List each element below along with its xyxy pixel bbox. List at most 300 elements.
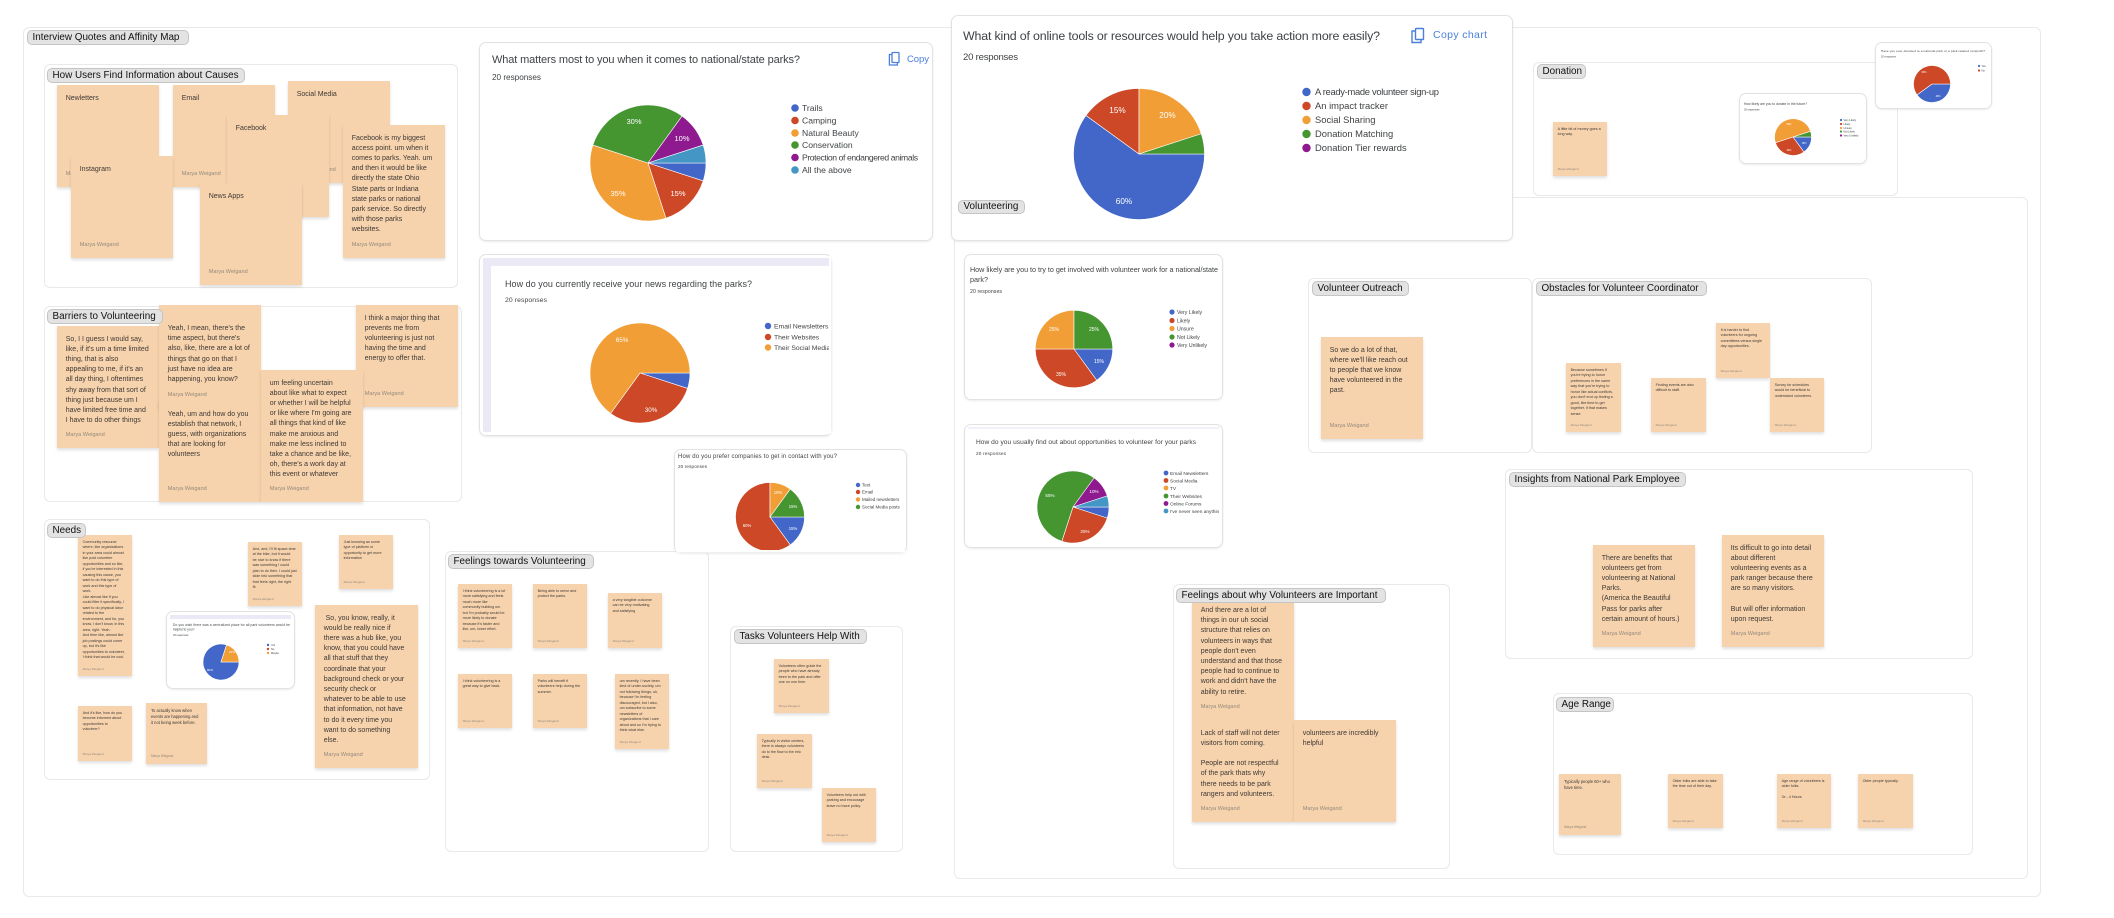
sticky: older people typically: [1858, 774, 1913, 828]
sticky: benefits quote: Pass for parks after: [1602, 606, 1662, 613]
chart card: centralized place pie chart: Do you wish there was a centralized place for all park volunteers would be: [173, 623, 290, 627]
sticky: community resource quote: opportunities to volunteer,: [83, 650, 125, 654]
sticky: central hub quote: security check or: [324, 686, 376, 693]
sticky: satisfying quote: much more like: [463, 600, 488, 604]
chart card: receive news pie chart: [479, 254, 832, 436]
sticky: lack of staff quote: rangers and volunteers.: [1201, 791, 1274, 798]
heading: Volunteer Outreach: [1312, 281, 1409, 296]
sticky: reach out quote: past.: [1330, 387, 1345, 394]
sticky: feeling uncertain quote: make me anxious and: [270, 431, 338, 438]
sticky: plan ahead quote: And, and, I'll fit space-time: [253, 546, 296, 550]
sticky: newsletters quote: organizations that I care: [620, 717, 659, 721]
chart card: how likely to volunteer pie chart: 25%: [1049, 327, 1060, 333]
sticky: feeling uncertain quote: about like what to expect: [270, 390, 347, 397]
sticky: reach out quote: [1321, 337, 1423, 439]
sticky: community resource quote: want to do this type of: [83, 578, 118, 582]
panel: Barriers to Volunteering: [44, 306, 462, 502]
sticky: people 60+: Typically people 60+ who: [1564, 779, 1610, 784]
chart card: find out about opportunities pie chart: 55%: [1045, 493, 1055, 498]
sticky: older folks time: Older folks are able to take: [1673, 778, 1717, 782]
panel: Age Range: [1553, 693, 1973, 855]
sticky: preferences quote: together, if that makes: [1571, 406, 1607, 410]
chart card: online tools pie chart: 60%: [1116, 197, 1132, 206]
sticky: plan ahead quote: fit.: [253, 585, 256, 589]
chart card: how likely to volunteer pie chart: [964, 254, 1223, 400]
sticky: benefits quote: There are benefits that: [1602, 554, 1672, 562]
heading: Needs: [47, 523, 86, 538]
sticky: parks benefit quote: Marya Weigand: [538, 719, 559, 723]
sticky: benefits quote: volunteering at National: [1602, 575, 1675, 582]
sticky: lack of staff quote: of the park thats why: [1201, 770, 1265, 777]
sticky: platform quote: [339, 535, 393, 589]
sticky: community resource quote: causing this cause, you: [83, 572, 121, 576]
chart card: find out about opportunities pie chart: [964, 424, 1223, 548]
sticky: incredibly helpful quote: [1294, 720, 1396, 822]
sticky: limited time quote: [57, 326, 159, 448]
sticky: Social Media: Social Media: [297, 90, 337, 98]
sticky: community resource quote: area, right. Yeah.: [83, 628, 110, 632]
chart card: likely to donate pie chart: Very Likely: [1844, 118, 1857, 122]
sticky: know when events happen: it not being week before.: [151, 720, 196, 725]
heading: Insights from National Park Employee: Insights from National Park Employee: [1514, 474, 1680, 485]
chart card: prefer contact pie chart: Text: [862, 482, 871, 488]
sticky: Facebook quote: comes to parks. Yeah. um: [352, 155, 432, 162]
sticky: social structure quote: work and didn't have the: [1201, 678, 1276, 685]
chart card: find out about opportunities pie chart: 10%: [1089, 489, 1099, 494]
chart card: receive news pie chart: Email Newsletters: [774, 324, 829, 330]
chart card: what matters most pie chart: Camping: [802, 116, 837, 126]
chart card: what matters most pie chart: Trails: [802, 103, 823, 113]
sticky: ongoing committees: It is harder to find: [1721, 328, 1749, 332]
sticky: feeling uncertain quote: take a chance and be like,: [270, 451, 351, 458]
sticky: visitor centers: desk.: [762, 755, 770, 759]
sticky: social structure quote: Marya Weigand: [1201, 704, 1240, 710]
sticky: benefits quote: volunteers get from: [1602, 565, 1662, 572]
sticky: know when events happen: events are happening and: [151, 714, 198, 719]
sticky: plan ahead quote: be nice to know if there: [253, 558, 291, 562]
chart card: receive news pie chart: Their Websites: [774, 334, 820, 342]
chart card: prefer contact pie chart: Email: [862, 490, 873, 494]
sticky: become informed quote: opportunities to: [83, 722, 108, 726]
sticky: satisfying quote: more satisfying and feels: [463, 594, 503, 598]
sticky: community resource quote: Community resource: [83, 540, 117, 544]
chart card: centralized place pie chart: Maybe: [271, 651, 279, 655]
sticky: know when events happen: To actually know when: [151, 708, 192, 713]
sticky: reach out quote: to people that we know: [1330, 367, 1401, 374]
sticky: age range of volunteers: 3x - 4 Hours: [1782, 795, 1802, 799]
sticky: newsletters quote: about and so I'm trying to: [620, 722, 661, 726]
sticky: platform quote: information: [344, 556, 362, 560]
sticky: time and energy quote: I think a major thing that: [365, 314, 439, 322]
chart card: how likely to volunteer pie chart: park?: [970, 275, 988, 284]
heading: Barriers to Volunteering: [47, 309, 163, 324]
sticky: limited time quote: So, I I guess I would say,: [66, 336, 143, 342]
sticky: Facebook quote: State parts or Indiana: [352, 186, 419, 193]
sticky: central hub quote: coordinate that your: [324, 666, 386, 673]
sticky: establish network quote: establish that network, I: [168, 421, 241, 428]
sticky: plan ahead quote: Marya Weigand: [253, 597, 274, 601]
sticky: incredibly helpful quote: helpful: [1303, 740, 1323, 747]
chart card: prefer contact pie chart: 15%: [789, 504, 797, 509]
sticky: central hub quote: want to do something: [324, 727, 390, 734]
sticky: Facebook quote: access point. um when it: [352, 145, 428, 152]
sticky: central hub quote: else.: [324, 737, 338, 744]
sticky: little bit of money: [1553, 122, 1607, 176]
sticky: central hub quote: whatever to be able to use: [324, 696, 406, 703]
chart card: likely to donate pie chart: [1739, 93, 1867, 164]
sticky: difficult to detail quote: about different: [1731, 555, 1775, 562]
sticky: ongoing committees: [1716, 323, 1770, 378]
sticky: benefits quote: [1593, 545, 1695, 647]
sticky: community resource quote: where, like organizations: [83, 545, 123, 549]
sticky: community resource quote: work and this type of: [83, 584, 116, 588]
heading: Insights from National Park Employee: [1509, 472, 1686, 487]
sticky: community resource quote: if you're interested in this: [83, 567, 123, 571]
sticky: difficult to detail quote: But will offer information: [1731, 606, 1805, 613]
sticky: reach out quote: So we do a lot of that,: [1330, 346, 1397, 354]
chart card: what matters most pie chart: Conservation: [802, 140, 853, 150]
chart card: centralized place pie chart: 80%: [207, 668, 213, 672]
sticky: older folks time: the time out of their day.: [1673, 784, 1712, 788]
heading: Needs: Needs: [52, 525, 81, 536]
chart card: how likely to volunteer pie chart: 15%: [1094, 359, 1105, 365]
sticky: feeling uncertain quote: Marya Weigand: [270, 486, 309, 492]
chart card: how likely to volunteer pie chart: 35%: [1056, 372, 1067, 378]
chart card: online tools pie chart: Copy chart: [1433, 29, 1487, 41]
chart card: online tools pie chart: An impact tracker: [1315, 100, 1388, 111]
sticky: Facebook: [227, 115, 329, 217]
chart card: how likely to volunteer pie chart: 25%: [1089, 327, 1100, 333]
sticky: establish network quote: Marya Weigand: [168, 486, 207, 492]
chart card: ever donated pie chart: 20 responses: [1881, 56, 1897, 58]
sticky: schedule surveys: Survey for schedules: [1775, 382, 1809, 386]
sticky: incredibly helpful quote: volunteers are incredibly: [1303, 730, 1379, 736]
sticky: parking: parking and encourage: [827, 798, 864, 802]
sticky: tangible outcome quote: [608, 593, 662, 648]
sticky: limited time quote: thing, that is also: [66, 356, 118, 363]
sticky: satisfying quote: I think volunteering is a lot: [463, 588, 505, 592]
sticky: schedule surveys: understand volunteers.: [1775, 394, 1812, 398]
chart card: ever donated pie chart: [1875, 42, 1992, 109]
sticky: Facebook quote: and then it would be like: [352, 165, 427, 172]
sticky: parking: leave no trace policy.: [827, 804, 861, 808]
chart card: prefer contact pie chart: Mailed newsletters: [862, 497, 900, 502]
sticky: feeling uncertain quote: or like where I'm going are: [270, 410, 352, 417]
sticky: reach out quote: where we'll like reach out: [1330, 357, 1408, 364]
sticky: social structure quote: people don't even: [1201, 648, 1256, 655]
sticky: become informed quote: become informed about: [83, 716, 121, 720]
chart card: likely to donate pie chart: 30%: [1787, 149, 1792, 152]
sticky: central hub quote: background check or your: [324, 676, 404, 683]
sticky: limited time quote: all day thing, I oftentimes: [66, 376, 143, 383]
sticky: community resource quote: And then like, almost like: [83, 633, 123, 637]
sticky: people 60+: Marya Weigand: [1564, 825, 1586, 829]
sticky: limited time quote: Marya Weigand: [66, 432, 105, 438]
sticky: parking: Marya Weigand: [827, 833, 848, 837]
sticky: visitor centers: [757, 734, 812, 788]
sticky: preferences quote: way that you're trying to: [1571, 384, 1609, 388]
sticky: difficult to detail quote: are so many visitors.: [1731, 585, 1795, 592]
chart card: ever donated pie chart: 40%: [1936, 95, 1941, 98]
panel: How Users Find Information about Causes: [44, 64, 458, 288]
sticky: Facebook quote: [343, 125, 445, 258]
sticky: central hub quote: there was a hub like, you: [324, 635, 401, 642]
sticky: Newletters: Newletters: [66, 94, 99, 102]
sticky: limited time quote: I have to do other things: [66, 417, 141, 424]
sticky: know when events happen: [146, 703, 207, 764]
sticky: central hub quote: [315, 605, 418, 768]
sticky: establish network quote: guess, with organizations: [168, 431, 246, 438]
chart card: how likely to volunteer pie chart: 20 responses: [970, 289, 1002, 295]
chart card: online tools pie chart: What kind of online tools or resources would help you take action more easily?: [963, 29, 1380, 43]
chart card: online tools pie chart: 15%: [1109, 106, 1126, 115]
sticky: benefits quote: (America the Beautiful: [1602, 595, 1671, 602]
sticky: staffing events: [1651, 378, 1706, 432]
sticky: parking: Volunteers help out with: [827, 792, 866, 796]
chart card: likely to donate pie chart: Likely: [1844, 122, 1851, 126]
sticky: guide people: Volunteers often guide the: [779, 664, 821, 668]
sticky: feeling uncertain quote: make me less inclined to: [270, 441, 346, 448]
sticky: age range of volunteers: Age range of volunteers is: [1782, 778, 1824, 782]
sticky: guide people: one on one time.: [779, 680, 806, 684]
sticky: give back quote: [458, 674, 512, 728]
sticky: parking: [822, 788, 876, 842]
chart card: prefer contact pie chart: 20 responses: [678, 464, 708, 469]
sticky: preferences quote: sense.: [1571, 412, 1581, 416]
heading: How Users Find Information about Causes: [47, 68, 245, 83]
sticky: benefits quote: certain amount of hours.): [1602, 616, 1680, 623]
heading: Feelings towards Volunteering: Feelings towards Volunteering: [454, 556, 586, 567]
sticky: time and energy quote: volunteering is just not: [365, 335, 434, 342]
sticky: give back quote: Marya Weigand: [463, 719, 484, 723]
chart card: prefer contact pie chart: Social Media posts: [862, 504, 901, 510]
sticky: preferences quote: good, like time to get: [1571, 400, 1605, 404]
heading: Donation: [1537, 64, 1586, 79]
sticky: guide people: Marya Weigand: [779, 704, 800, 708]
sticky: central hub quote: So, you know, really, it: [326, 614, 395, 622]
chart card: ever donated pie chart: Yes: [1982, 64, 1986, 68]
sticky: social structure quote: [1192, 603, 1294, 720]
sticky: older folks time: Marya Weigand: [1673, 819, 1694, 823]
chart card: receive news pie chart: How do you currently receive your news regarding the parks?: [505, 279, 752, 289]
sticky: limited time quote: have limited free time and: [66, 407, 146, 414]
sticky: lack of staff quote: Marya Weigand: [1201, 806, 1240, 812]
sticky: parks benefit quote: [533, 674, 587, 728]
sticky: central hub quote: that information, not have: [324, 706, 403, 713]
chart card: what matters most pie chart: 35%: [610, 189, 626, 198]
sticky: newsletters quote: newsletters of: [620, 712, 642, 716]
sticky: time and energy quote: prevents me from: [365, 325, 419, 332]
sticky: satisfying quote: Marya Weigand: [463, 639, 484, 643]
sticky: limited time quote: shy away from that sort of: [66, 387, 146, 394]
sticky: feeling uncertain quote: oh, there's a work day at: [270, 461, 346, 468]
sticky: preferences quote: preferences in the same: [1571, 378, 1610, 382]
sticky: lack of staff quote: Lack of staff will not deter: [1201, 730, 1280, 736]
panel: Tasks Volunteers Help With: [730, 626, 903, 852]
chart card: find out about opportunities pie chart: Online Forums: [1170, 502, 1202, 508]
chart card: online tools pie chart: 20 responses: [963, 52, 1018, 63]
chart card: prefer contact pie chart: 15%: [789, 526, 797, 531]
sticky: difficult to detail quote: [1722, 535, 1824, 647]
heading: Tasks Volunteers Help With: Tasks Volunteers Help With: [740, 631, 860, 642]
sticky: Email: Marya Weigand: [182, 171, 221, 177]
sticky: incredibly helpful quote: Marya Weigand: [1303, 806, 1342, 812]
sticky: social structure quote: volunteers in ways that: [1201, 638, 1272, 645]
heading: Obstacles for Volunteer Coordinator: Obstacles for Volunteer Coordinator: [1542, 283, 1698, 294]
sticky: visitor centers: Marya Weigand: [762, 779, 783, 783]
sticky: community resource quote: like post volunteer: [83, 556, 112, 560]
sticky: know when events happen: Marya Weigand: [151, 754, 173, 758]
sticky: newsletters quote: not following things, uh,: [620, 690, 658, 694]
heading: Interview Quotes and Affinity Map: [27, 30, 189, 45]
chart card: likely to donate pie chart: Not Likely: [1844, 130, 1856, 134]
chart card: receive news pie chart: 65%: [616, 337, 629, 344]
sticky: ongoing committees: committees versus single: [1721, 338, 1762, 342]
panel: Volunteer Outreach: [1308, 278, 1532, 453]
sticky: people 60+: [1559, 774, 1621, 835]
chart card: ever donated pie chart: No: [1982, 68, 1985, 72]
chart card: what matters most pie chart: 15%: [670, 189, 686, 198]
sticky: tangible outcome quote: can be very motivating: [613, 603, 650, 607]
panel: Volunteering frame: [954, 197, 2028, 879]
sticky: age range of volunteers: Marya Weigand: [1782, 819, 1803, 823]
sticky: people 60+: have time.: [1564, 785, 1583, 790]
sticky: age range of volunteers: older folks.: [1782, 784, 1799, 788]
sticky: older folks time: [1668, 774, 1723, 828]
sticky: time aspect quote: Yeah, I mean, there's the: [168, 325, 245, 332]
sticky: lack of staff quote: [1192, 720, 1294, 822]
chart card: what matters most pie chart: 30%: [626, 117, 642, 126]
panel: Needs: [44, 519, 430, 780]
sticky: little bit of money: long way.: [1558, 132, 1573, 136]
sticky: newsletters quote: think what else.: [620, 728, 645, 732]
sticky: social structure quote: things in our uh social: [1201, 617, 1268, 624]
sticky: News Apps: News Apps: [209, 192, 244, 200]
sticky: satisfying quote: more likely to donate: [463, 616, 497, 620]
chart card: prefer contact pie chart: [674, 449, 907, 553]
sticky: ongoing committees: volunteers for ongoing: [1721, 333, 1757, 337]
sticky: preferences quote: Because sometimes if: [1571, 368, 1607, 372]
sticky: become informed quote: And it's like, how do you: [83, 710, 122, 714]
chart card: receive news pie chart: 30%: [645, 407, 658, 414]
sticky: plan ahead quote: [248, 542, 302, 606]
sticky: time aspect quote: [159, 305, 261, 408]
sticky: age range of volunteers: [1777, 774, 1831, 828]
sticky: give back quote: great way to give back.: [463, 684, 500, 688]
sticky: newsletters quote: Marya Weigand: [620, 740, 641, 744]
sticky: time and energy quote: having the time and: [365, 345, 426, 352]
sticky: lack of staff quote: there needs to be park: [1201, 781, 1271, 788]
chart card: prefer contact pie chart: 10%: [774, 490, 782, 495]
sticky: lack of staff quote: People are not respectful: [1201, 760, 1279, 767]
sticky: Facebook quote: Facebook is my biggest: [352, 134, 425, 142]
sticky: establish network quote: [159, 401, 261, 502]
sticky: establish network quote: volunteers: [168, 451, 200, 458]
sticky: community resource quote: environment, and for, you: [83, 616, 124, 620]
chart card: online tools pie chart: A ready-made volunteer sign-up: [1315, 86, 1439, 97]
chart card: ever donated pie chart: 60%: [1922, 71, 1927, 74]
sticky: central hub quote: know, that you could have: [324, 645, 404, 652]
sticky: News Apps: Marya Weigand: [209, 269, 248, 275]
sticky: parks benefit quote: Parks will benefit if: [538, 678, 568, 682]
sticky: Facebook quote: directly the state Ohio: [352, 175, 419, 182]
sticky: feeling uncertain quote: [261, 370, 363, 502]
sticky: newsletters quote: because I'm feeling: [620, 695, 651, 699]
sticky: guide people: people who have already: [779, 669, 820, 673]
chart card: centralized place pie chart: 20 responses: [173, 633, 189, 637]
sticky: community resource quote: Marya Weigand: [83, 667, 104, 671]
sticky: visitor centers: do to the flow to the info: [762, 750, 801, 754]
sticky: preferences quote: [1566, 363, 1621, 432]
sticky: community resource quote: related to the: [83, 611, 104, 615]
chart card: centralized place pie chart: [166, 611, 295, 689]
sticky: limited time quote: thing just because um I: [66, 397, 138, 404]
chart card: how likely to volunteer pie chart: How likely are you to try to get involved with volunteer work for a national/state: [970, 265, 1218, 274]
sticky: Social Media: Marya Weigand: [297, 167, 336, 173]
sticky: feeling uncertain quote: or whether I will be helpful: [270, 400, 351, 407]
chart card: find out about opportunities pie chart: 25%: [1080, 529, 1090, 534]
heading: Donation: Donation: [1542, 66, 1582, 77]
sticky: community resource quote: could filter it specifically, I: [83, 600, 124, 604]
chart card: likely to donate pie chart: Very Unlikely: [1844, 134, 1859, 138]
sticky: community resource quote: want to do physical labor: [83, 606, 123, 610]
chart card: how likely to volunteer pie chart: Unsure: [1177, 326, 1194, 332]
chart card: online tools pie chart: 20%: [1159, 111, 1176, 120]
sticky: tangible outcome quote: and satisfying: [613, 608, 635, 612]
heading: Feelings about why Volunteers are Important: [1176, 588, 1386, 603]
sticky: satisfying quote: like, um, lower effort.: [463, 627, 497, 631]
chart card: prefer contact pie chart: 60%: [743, 523, 751, 528]
sticky: establish network quote: Yeah, um and how do you: [168, 410, 248, 418]
chart card: what matters most pie chart: Copy: [907, 54, 929, 65]
sticky: become informed quote: Marya Weigand: [83, 752, 104, 756]
sticky: plan ahead quote: at the bike, but it would: [253, 552, 290, 556]
panel: Insights from National Park Employee: [1505, 469, 1973, 659]
sticky: platform quote: Marya Weigand: [344, 580, 365, 584]
chart card: what matters most pie chart: All the above: [802, 165, 852, 175]
sticky: become informed quote: volunteer?: [83, 727, 100, 731]
heading: Volunteering: Volunteering: [964, 201, 1018, 212]
sticky: satisfying quote: [458, 584, 512, 648]
sticky: preferences quote: honor like actual conflicts,: [1571, 390, 1613, 394]
sticky: community resource quote: job postings could come: [83, 638, 122, 642]
sticky: Facebook quote: Marya Weigand: [352, 242, 391, 248]
sticky: Facebook: Marya Weigand: [236, 201, 275, 207]
heading: Barriers to Volunteering: Barriers to Volunteering: [52, 311, 156, 322]
sticky: schedule surveys: Marya Weigand: [1775, 423, 1796, 427]
sticky: newsletters quote: [615, 674, 669, 749]
sticky: social structure quote: people had to continue to: [1201, 668, 1279, 675]
heading: Obstacles for Volunteer Coordinator: [1536, 281, 1707, 296]
chart card: find out about opportunities pie chart: I've never seen anythin: [1170, 509, 1220, 515]
sticky: establish network quote: that are looking for: [168, 441, 226, 448]
sticky: reach out quote: Marya Weigand: [1330, 423, 1369, 429]
sticky: community resource quote: work.: [83, 589, 91, 593]
sticky: visitor centers: there is always volunteers: [762, 744, 804, 748]
sticky: time and energy quote: [356, 305, 458, 407]
chart card: online tools pie chart: Social Sharing: [1315, 114, 1375, 125]
sticky: Facebook quote: websites.: [352, 226, 381, 233]
sticky: parks benefit quote: volunteers help during the: [538, 684, 580, 688]
chart card: find out about opportunities pie chart: How do you usually find out about opportunities to volunteer for your parks: [976, 439, 1197, 446]
sticky: satisfying quote: because it's faster and: [463, 622, 499, 626]
chart card: likely to donate pie chart: 20 responses: [1744, 108, 1760, 112]
sticky: preferences quote: Marya Weigand: [1571, 423, 1592, 427]
chart card: how likely to volunteer pie chart: Likely: [1177, 318, 1191, 324]
sticky: staffing events: Finding events are also: [1656, 382, 1694, 386]
sticky: lack of staff quote: visitors from coming.: [1201, 740, 1265, 747]
chart card: how likely to volunteer pie chart: Not Likely: [1177, 335, 1200, 341]
